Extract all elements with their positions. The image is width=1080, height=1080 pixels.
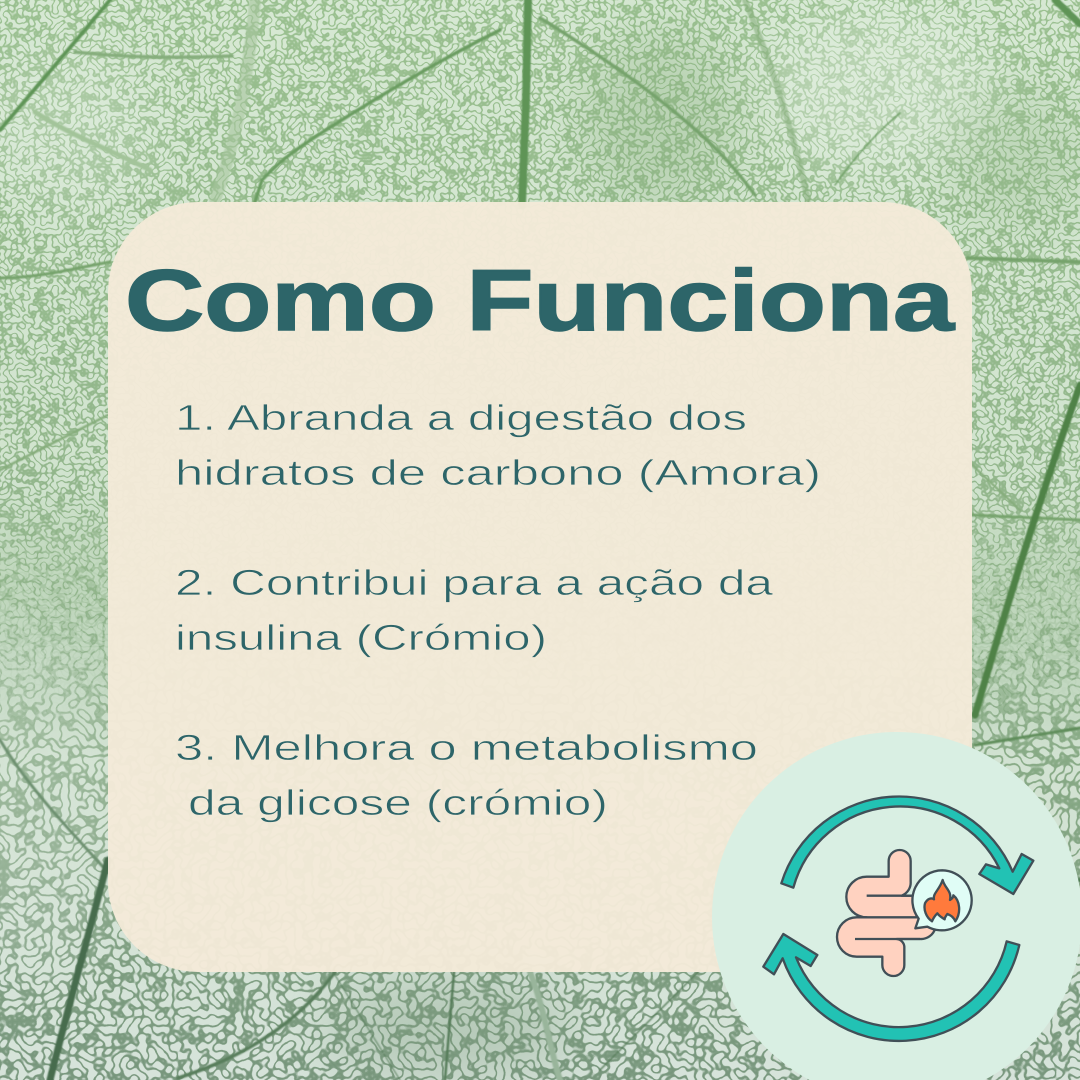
text block: list of benefits [175,397,821,823]
icon: intestine [837,850,935,976]
text block: list of benefits: 3. Melhora o metabolismo [175,727,758,768]
icon badge: circle background [712,732,1080,1080]
text block: list of benefits: da glicose (crómio) [188,782,608,823]
icon: metabolism cycle with intestine and flame [763,797,1033,1041]
text block: list of benefits: insulina (Crómio) [175,617,547,658]
title: Como Funciona [125,253,955,349]
icon: top cycle arrow [781,797,1033,894]
text block: list of benefits: 2. Contribui para a ação da [175,562,774,603]
text block: list of benefits: hidratos de carbono (Amora) [175,452,821,493]
icon: bottom cycle arrow [763,934,1019,1041]
text block: list of benefits: 1. Abranda a digestão dos [175,397,747,438]
icon: speech bubble with flame [912,870,972,930]
